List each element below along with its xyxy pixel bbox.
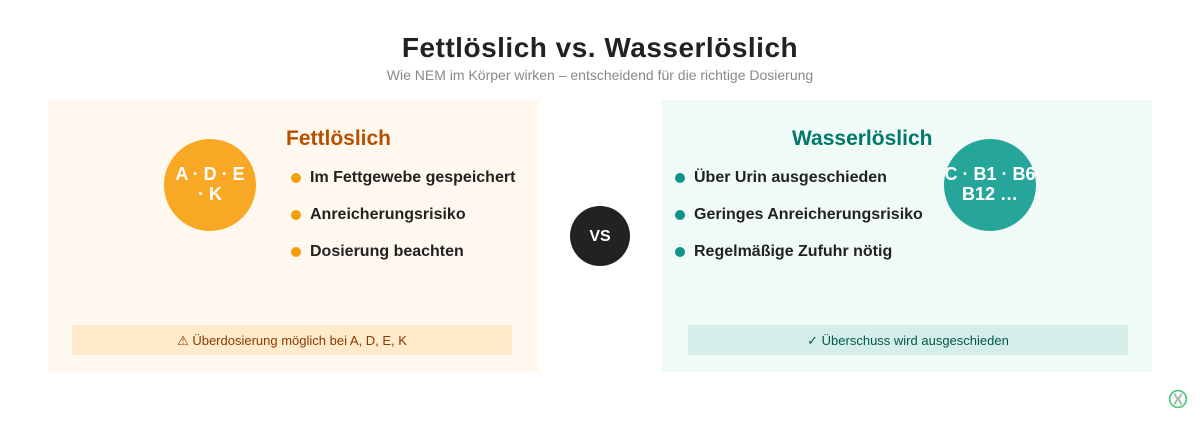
title: Fettlöslich vs. Wasserlöslich (402, 32, 798, 63)
heading: Fettlöslich: Fettlöslich (286, 127, 391, 150)
callout: surplus excreted: ✓ Überschuss wird ausgeschieden (807, 333, 1009, 348)
callout: surplus excreted (688, 325, 1128, 355)
icon: VS badge (570, 206, 630, 266)
icon: vitamin circle A D E K: · K (198, 184, 222, 204)
list item: low accumulation risk: Geringes Anreicherungsrisiko (694, 206, 923, 223)
list item: mind dosage: Dosierung beachten (310, 243, 464, 260)
icon: VS badge: VS (589, 228, 611, 245)
panel: fat-soluble (48, 100, 538, 372)
list item: accumulation risk: Anreicherungsrisiko (310, 206, 466, 223)
list item: excreted in urine: Über Urin ausgeschieden (694, 169, 887, 186)
callout: overdose warning (72, 325, 512, 355)
icon: vitamin circle C B1 B6 B12 (944, 139, 1036, 231)
list item: stored in fat tissue: Im Fettgewebe gespeichert (310, 169, 515, 186)
subtitle: Wie NEM im Körper wirken – entscheidend für die richtige Dosierung (387, 67, 813, 83)
heading: Wasserlöslich: Wasserlöslich (792, 127, 932, 150)
icon: vitamin circle C B1 B6 B12: C · B1 · B6 (944, 164, 1036, 184)
icon: vitamin circle C B1 B6 B12: B12 … (962, 184, 1018, 204)
panel: water-soluble (662, 100, 1152, 372)
list item: regular intake needed: Regelmäßige Zufuhr nötig (694, 243, 892, 260)
icon: logo mark (1168, 390, 1188, 408)
callout: overdose warning: ⚠ Überdosierung möglich bei A, D, E, K (177, 333, 407, 348)
icon: vitamin circle A D E K (164, 139, 256, 231)
icon: vitamin circle A D E K: A · D · E (175, 164, 245, 184)
